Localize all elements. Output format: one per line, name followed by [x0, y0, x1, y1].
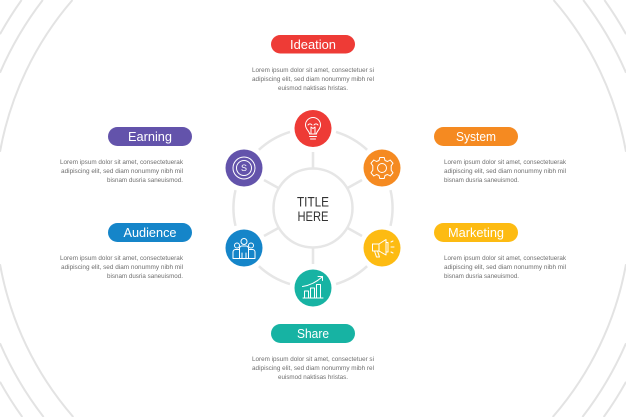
text block: share: Lorem ipsum dolor sit amet, consectetuer si — [252, 357, 374, 363]
panel: system — [434, 127, 567, 184]
text block: system: bisnam dusria saneuismod. — [444, 178, 519, 184]
text block: ideation: euismod naktisas hristas. — [278, 86, 348, 92]
text block: system: adipiscing elit, sed diam nonummy nibh mil — [444, 169, 566, 175]
text block: marketing: Lorem ipsum dolor sit amet, consectetuerak — [444, 256, 567, 262]
center title: TITLE — [297, 194, 329, 210]
text block: audience: Lorem ipsum dolor sit amet, consectetuerak — [60, 256, 184, 262]
ring arcs — [233, 132, 393, 284]
heading: ideation: Ideation — [290, 37, 336, 52]
panel: earning — [60, 127, 192, 184]
text block: ideation: Lorem ipsum dolor sit amet, consectetuer si — [252, 68, 374, 74]
heading: audience: Audience — [124, 225, 176, 240]
icon: people — [226, 230, 262, 266]
heading: share: Share — [297, 326, 329, 341]
label pill: ideation — [271, 35, 355, 54]
text block: earning: bisnam dusria saneuismod. — [107, 178, 183, 184]
heading: earning: Earning — [128, 129, 172, 144]
panel: audience — [60, 223, 192, 280]
label pill: audience — [108, 223, 192, 242]
icon: growth chart — [294, 270, 332, 306]
panel: marketing — [434, 223, 567, 280]
text block: system: Lorem ipsum dolor sit amet, consectetuerak — [444, 160, 567, 166]
panel: ideation — [252, 35, 374, 92]
icon: gear — [364, 150, 400, 186]
label pill: system — [434, 127, 518, 146]
text block: marketing: adipiscing elit, sed diam nonummy nibh mil — [444, 265, 566, 271]
heading: marketing: Marketing — [448, 225, 504, 240]
center circle — [274, 168, 352, 248]
text block: marketing: bisnam dusria saneuismod. — [444, 274, 519, 280]
text block: earning: Lorem ipsum dolor sit amet, consectetuerak — [60, 160, 184, 166]
icon: dollar coin — [226, 150, 262, 186]
label pill: marketing — [434, 223, 518, 242]
icon: megaphone — [364, 230, 400, 266]
text block: earning: adipiscing elit, sed diam nonummy nibh mil — [61, 169, 183, 175]
text block: audience: bisnam dusria saneuismod. — [107, 274, 183, 280]
icon: light bulb — [294, 110, 332, 147]
center title: HERE — [298, 209, 328, 224]
icon: dollar coin: S — [241, 163, 247, 173]
label pill: earning — [108, 127, 192, 146]
spokes — [264, 152, 362, 264]
label pill: share — [271, 324, 355, 343]
panel: share — [252, 324, 374, 381]
text block: ideation: adipiscing elit, sed diam nonummy mibh rel — [252, 77, 374, 83]
text block: share: euismod naktisas hristas. — [278, 375, 348, 381]
text block: audience: adipiscing elit, sed diam nonummy nibh mil — [61, 265, 183, 271]
hub diagram — [226, 110, 400, 306]
text block: share: adipiscing elit, sed diam nonummy mibh rel — [252, 366, 374, 372]
heading: system: System — [456, 129, 496, 144]
